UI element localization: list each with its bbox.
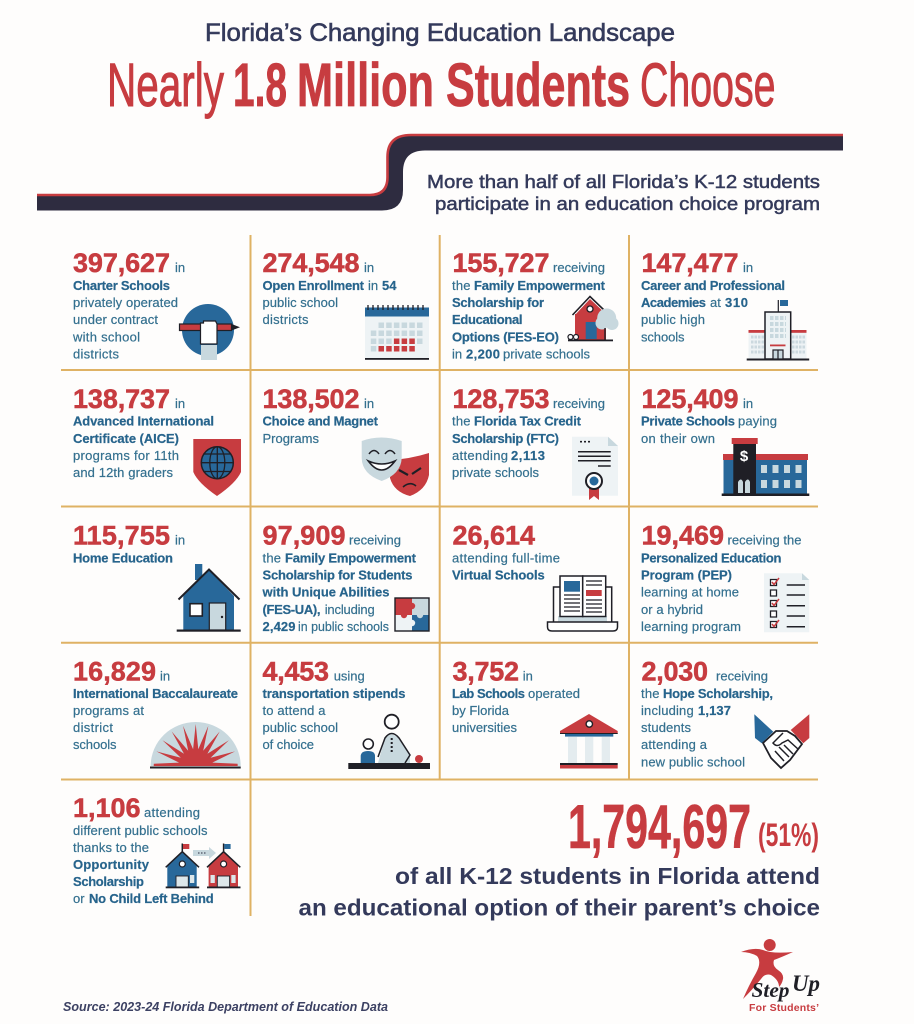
description: in bbox=[364, 396, 374, 411]
description bbox=[452, 396, 605, 480]
cell: open enrollment bbox=[262, 248, 429, 360]
logo: Step Up For Students: Step bbox=[752, 978, 790, 1002]
icon: sunburst bbox=[150, 722, 241, 768]
description: Career and Professional bbox=[641, 278, 785, 293]
description: private schools bbox=[503, 346, 590, 362]
number: 155,727 bbox=[452, 248, 550, 278]
icon: handshake bbox=[754, 714, 809, 768]
cell: career academies bbox=[641, 248, 809, 360]
intro statement: More than half of all Florida’s K-12 students bbox=[427, 171, 820, 192]
description: private schools bbox=[452, 465, 540, 480]
description: in bbox=[452, 346, 462, 362]
description: in bbox=[364, 260, 374, 275]
description: thanks to the bbox=[73, 840, 149, 855]
description bbox=[452, 260, 606, 362]
description bbox=[262, 396, 379, 446]
description: or bbox=[73, 891, 85, 906]
description: under contract bbox=[73, 312, 158, 327]
description: with Unique Abilities bbox=[262, 585, 390, 600]
description: 2,200 bbox=[466, 346, 500, 362]
description: Program (PEP) bbox=[641, 567, 732, 582]
cell: transportation stipends bbox=[262, 656, 430, 769]
cell: FES-UA bbox=[262, 520, 429, 634]
description: receiving bbox=[553, 260, 605, 275]
logo: Step Up For Students: For Students’ bbox=[749, 1002, 819, 1014]
description: Certificate (AICE) bbox=[73, 431, 179, 446]
description: programs for 11th bbox=[73, 448, 179, 463]
main title: Nearly bbox=[107, 51, 224, 119]
cell: virtual schools bbox=[452, 520, 618, 631]
description: public high bbox=[641, 312, 705, 327]
total percent: (51%) bbox=[758, 817, 819, 853]
description: Family Empowerment bbox=[474, 278, 606, 293]
icon: teacher and student bbox=[348, 715, 430, 769]
icon: university building bbox=[560, 714, 618, 768]
description: receiving the bbox=[728, 532, 802, 548]
cell: private schools bbox=[641, 384, 809, 496]
description: Scholarship (FTC) bbox=[452, 431, 559, 446]
cell: international baccalaureate bbox=[73, 656, 241, 768]
description bbox=[641, 668, 773, 770]
number: 3,752 bbox=[452, 656, 519, 686]
intro statement bbox=[427, 171, 820, 214]
description: 1,137 bbox=[698, 703, 731, 718]
description bbox=[641, 260, 785, 344]
description: the bbox=[262, 550, 281, 565]
description: districts bbox=[262, 312, 309, 327]
cell: opportunity scholarship bbox=[73, 793, 240, 906]
description bbox=[73, 805, 214, 906]
description: the bbox=[641, 686, 660, 701]
description: learning program bbox=[641, 619, 741, 634]
description: 54 bbox=[382, 278, 397, 293]
icon: high school building bbox=[747, 300, 809, 360]
description: district bbox=[73, 720, 113, 735]
icon: certificate bbox=[572, 437, 618, 500]
logo: Step Up For Students bbox=[741, 939, 820, 1014]
main title: Million bbox=[297, 51, 434, 119]
description: in bbox=[743, 260, 753, 275]
description: Family Empowerment bbox=[285, 550, 417, 565]
description: receiving bbox=[553, 396, 605, 411]
description: Virtual Schools bbox=[452, 567, 545, 582]
total number: 1,794,697 bbox=[568, 793, 751, 862]
cell: choice and magnet bbox=[262, 384, 429, 496]
description: in bbox=[368, 278, 378, 293]
icon: theater masks bbox=[362, 438, 429, 496]
description: 2,429 bbox=[262, 619, 296, 634]
intro statement: participate in an education choice program bbox=[435, 193, 820, 214]
description bbox=[72, 260, 185, 362]
description: districts bbox=[73, 346, 120, 362]
description bbox=[641, 532, 802, 634]
description: Advanced International bbox=[73, 414, 214, 429]
total description bbox=[298, 863, 820, 920]
description: in bbox=[523, 668, 533, 684]
icon: two schools with arrow bbox=[166, 844, 240, 888]
icon: shield with globe bbox=[193, 439, 241, 496]
description: No Child Left Behind bbox=[89, 891, 214, 906]
total description: an educational option of their parent’s choice bbox=[298, 894, 820, 920]
icon: checklist bbox=[764, 573, 809, 632]
total description: of all K-12 students in Florida attend bbox=[395, 863, 820, 889]
description: Academies bbox=[641, 295, 706, 310]
total callout bbox=[298, 793, 820, 920]
description: at bbox=[710, 295, 721, 310]
description bbox=[262, 668, 406, 752]
description: including bbox=[641, 703, 694, 718]
cell: AICE bbox=[73, 384, 241, 496]
description: (FES-UA), bbox=[262, 602, 320, 617]
number: 19,469 bbox=[642, 520, 724, 550]
description: attending bbox=[144, 805, 200, 820]
description: using bbox=[334, 668, 365, 684]
description: schools bbox=[641, 330, 685, 344]
main title: 1.8 bbox=[233, 51, 287, 119]
source note: Source: 2023-24 Florida Department of Education Data bbox=[63, 999, 388, 1014]
description: Educational bbox=[452, 312, 522, 327]
number: 115,755 bbox=[73, 520, 170, 550]
description: including bbox=[325, 602, 375, 617]
swoosh banner bbox=[37, 135, 843, 210]
description bbox=[452, 550, 560, 582]
number: 128,753 bbox=[452, 384, 550, 414]
description: Hope Scholarship, bbox=[663, 686, 773, 701]
description: Florida Tax Credit bbox=[474, 414, 582, 429]
description: Programs bbox=[262, 431, 320, 446]
description: operated bbox=[528, 686, 580, 701]
description: in bbox=[175, 396, 185, 411]
icon: bank-like private school: $ bbox=[740, 448, 749, 465]
description: paying bbox=[738, 414, 777, 429]
number: 1,106 bbox=[73, 793, 140, 823]
subtitle heading: Florida’s Changing Education Landscape bbox=[205, 19, 675, 47]
icon: puzzle bbox=[395, 598, 429, 631]
cell: PEP bbox=[641, 520, 809, 634]
description: in bbox=[175, 532, 185, 548]
cell: florida tax credit bbox=[452, 384, 618, 500]
description: learning at home bbox=[641, 585, 739, 600]
description: Charter Schools bbox=[73, 278, 170, 293]
description: 2,113 bbox=[511, 448, 545, 463]
description: universities bbox=[452, 720, 518, 735]
icon: laptop with book bbox=[548, 576, 618, 631]
description: Private Schools bbox=[641, 414, 735, 429]
description bbox=[452, 668, 580, 735]
number: 2,030 bbox=[642, 656, 708, 686]
description: receiving bbox=[716, 668, 768, 684]
description: attending bbox=[452, 448, 508, 463]
description: different public schools bbox=[73, 823, 208, 838]
description: by Florida bbox=[452, 703, 510, 718]
description: to attend a bbox=[262, 703, 326, 718]
number: 16,829 bbox=[73, 656, 156, 686]
cell: hope scholarship bbox=[641, 656, 809, 770]
description: Scholarship for Students bbox=[262, 567, 412, 582]
icon: house bbox=[177, 564, 241, 632]
cell: home education bbox=[73, 520, 241, 632]
description: students bbox=[641, 720, 692, 735]
description: attending full-time bbox=[452, 550, 560, 565]
description bbox=[262, 260, 397, 327]
description: programs at bbox=[73, 703, 144, 718]
logo: Step Up For Students: Up bbox=[792, 971, 820, 996]
description: of choice bbox=[262, 737, 314, 752]
description bbox=[73, 396, 214, 480]
description: in bbox=[175, 260, 185, 275]
description: Scholarship bbox=[73, 874, 144, 889]
description: Scholarship for bbox=[452, 295, 544, 310]
description bbox=[641, 396, 777, 446]
description: attending a bbox=[641, 737, 708, 752]
icon: bank-like private school bbox=[722, 438, 809, 496]
number: 26,614 bbox=[452, 520, 535, 550]
description: with school bbox=[72, 330, 140, 344]
description: the bbox=[452, 278, 470, 293]
main title bbox=[107, 51, 776, 119]
description: schools bbox=[73, 737, 117, 752]
description: and 12th graders bbox=[73, 465, 174, 480]
number: 397,627 bbox=[73, 248, 170, 278]
description: public school bbox=[262, 720, 338, 735]
number: 274,548 bbox=[262, 248, 360, 278]
icon: calendar bbox=[365, 305, 429, 360]
number: 4,453 bbox=[262, 656, 329, 686]
description: Home Education bbox=[73, 550, 173, 565]
description: in public schools bbox=[298, 619, 389, 634]
description: or a hybrid bbox=[641, 602, 703, 617]
description: public school bbox=[262, 295, 338, 310]
icon: hand holding pencil bbox=[180, 304, 240, 360]
description: Options (FES-EO) bbox=[452, 330, 559, 344]
number: 147,477 bbox=[642, 248, 738, 278]
cell: charter schools bbox=[72, 248, 240, 362]
number: 125,409 bbox=[642, 384, 738, 414]
main title: Students bbox=[446, 51, 630, 119]
description: the bbox=[452, 414, 470, 429]
description: transportation stipends bbox=[262, 686, 406, 701]
description: Choice and Magnet bbox=[262, 414, 379, 429]
description: on their own bbox=[641, 431, 715, 446]
description: new public school bbox=[641, 754, 745, 770]
description: in bbox=[743, 396, 753, 411]
description bbox=[73, 532, 185, 565]
description: privately operated bbox=[73, 295, 178, 310]
description bbox=[262, 532, 417, 634]
main title: Choose bbox=[640, 51, 776, 119]
description: International Baccalaureate bbox=[73, 686, 238, 701]
cell: lab schools bbox=[452, 656, 618, 768]
description: Opportunity bbox=[73, 857, 150, 872]
number: 97,909 bbox=[262, 520, 346, 550]
description: in bbox=[160, 668, 170, 684]
number: 138,502 bbox=[262, 384, 360, 414]
description: 310 bbox=[725, 295, 748, 310]
icon: house with tree bbox=[568, 296, 618, 341]
description bbox=[73, 668, 238, 752]
number: 138,737 bbox=[73, 384, 170, 414]
description: Open Enrollment bbox=[262, 278, 365, 293]
description: Personalized Education bbox=[641, 550, 782, 565]
description: receiving bbox=[349, 532, 401, 548]
cell: FES-EO bbox=[452, 248, 618, 362]
description: Lab Schools bbox=[452, 686, 525, 701]
